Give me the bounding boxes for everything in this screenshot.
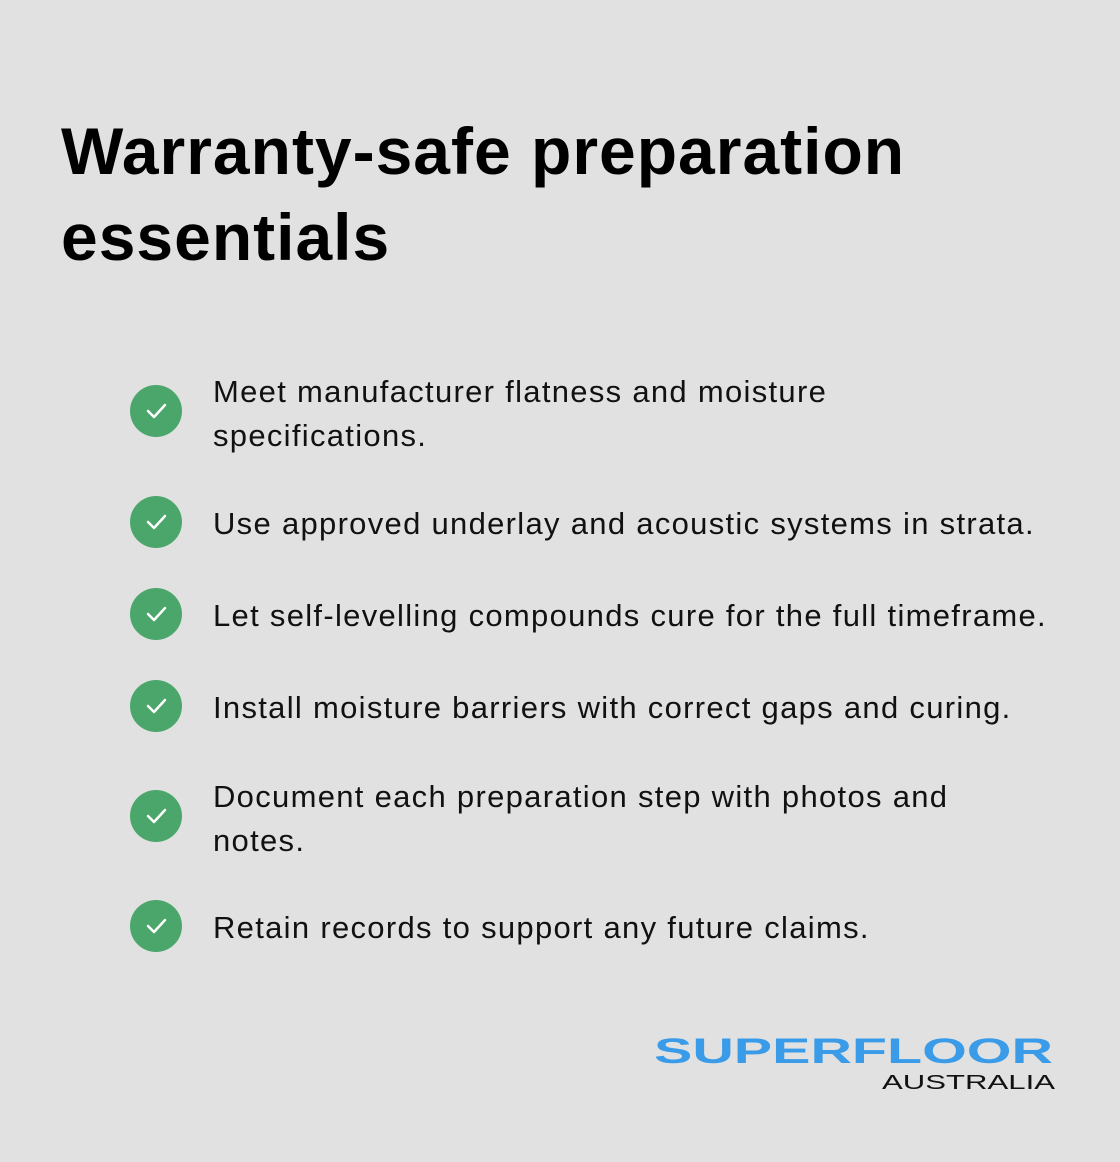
item 3	[130, 588, 1047, 640]
logo: AUSTRALIA	[882, 1072, 1056, 1094]
item 4	[130, 680, 1012, 732]
item 1: specifications.	[213, 418, 427, 453]
logo	[654, 1032, 1056, 1094]
item 1: Meet manufacturer flatness and moisture	[213, 374, 827, 409]
item 1	[130, 374, 827, 453]
item 2: Use approved underlay and acoustic systems in strata.	[213, 506, 1035, 541]
item 4: Install moisture barriers with correct gaps and curing.	[213, 690, 1012, 725]
item 5: Document each preparation step with photos and	[213, 779, 948, 814]
logo: SUPERFLOOR	[654, 1032, 1053, 1071]
item 6	[130, 900, 870, 952]
item 3: Let self-levelling compounds cure for the full timeframe.	[213, 598, 1047, 633]
item 5: notes.	[213, 823, 305, 858]
item 6: Retain records to support any future claims.	[213, 910, 870, 945]
title	[61, 114, 905, 274]
title: Warranty-safe preparation	[61, 114, 905, 188]
item 5	[130, 779, 948, 858]
title: essentials	[61, 200, 390, 274]
item 2	[130, 496, 1035, 548]
